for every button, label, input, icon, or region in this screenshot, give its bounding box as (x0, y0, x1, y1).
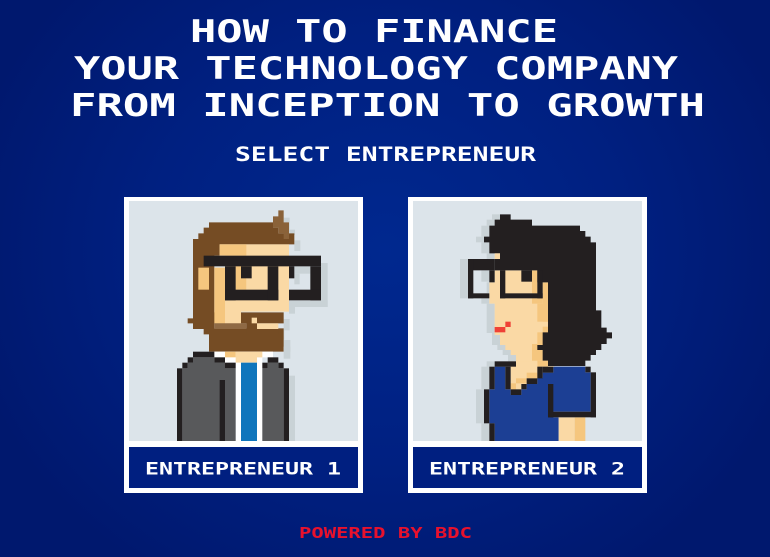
portrait: bearded man with glasses (177, 210, 328, 441)
subtitle: select entrepreneur: SELECT ENTREPRENEUR (235, 143, 536, 166)
portrait: woman with glasses (460, 214, 612, 441)
title: HOW TO FINANCE (190, 14, 558, 50)
title: YOUR TECHNOLOGY COMPANY (74, 51, 678, 87)
panel: entrepreneur 2 (408, 197, 647, 493)
title: FROM INCEPTION TO GROWTH (70, 88, 705, 124)
name plate: entrepreneur 2 (413, 447, 642, 488)
panel: entrepreneur 1 (124, 197, 363, 493)
name plate: entrepreneur 1 (129, 447, 358, 488)
footer: powered by BDC: POWERED BY BDC (299, 524, 472, 542)
name plate: entrepreneur 2: ENTREPRENEUR 2 (429, 460, 625, 480)
title (70, 14, 705, 124)
name plate: entrepreneur 1: ENTREPRENEUR 1 (145, 460, 341, 480)
